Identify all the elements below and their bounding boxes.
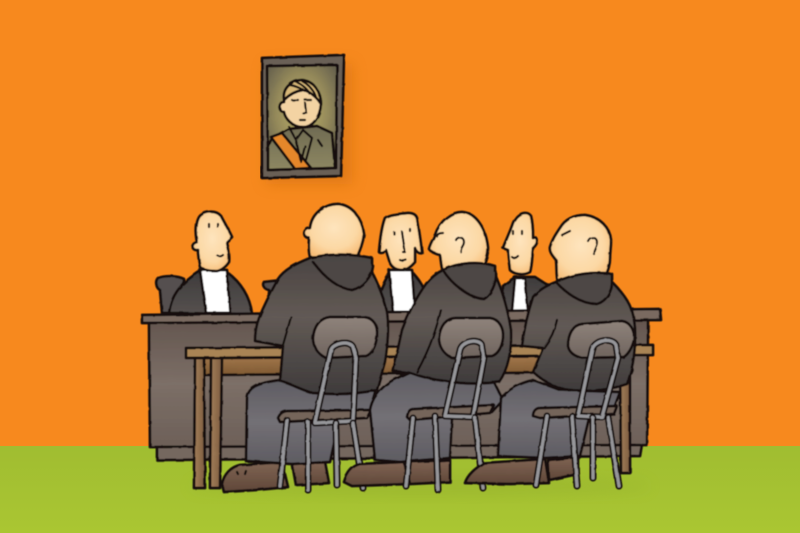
judge left: robe (169, 271, 252, 314)
judge right: white bib (512, 278, 528, 311)
judge right: robe (503, 277, 549, 313)
defendant 2: front shoe (344, 462, 408, 486)
long table (186, 345, 653, 488)
defendant 1: hood (313, 262, 373, 290)
defendant 1: back shoe (292, 462, 329, 485)
table legs (194, 358, 205, 488)
defendant 1: jacket (255, 255, 388, 394)
judge left: white bib (200, 270, 230, 313)
judge left (169, 212, 252, 314)
defendant 3: hood (556, 280, 612, 304)
defendant 2: back shoe (405, 460, 450, 484)
judge right: head (503, 213, 537, 274)
defendant 1: chair seat (278, 410, 371, 422)
portrait: hair (284, 80, 321, 104)
desk top (142, 309, 661, 323)
defendant 2 (middle) (344, 212, 511, 490)
portrait: facial features (292, 100, 311, 120)
portrait: sitter jacket (268, 126, 335, 170)
judge chair left (156, 276, 184, 313)
defendant 2: ear and brow (437, 233, 464, 252)
desk plinth (157, 444, 642, 460)
defendant 1: trousers (246, 380, 376, 464)
defendant 3: head (550, 215, 611, 283)
defendant 1: chair back (313, 317, 377, 358)
defendant 3: jacket (522, 273, 635, 391)
portrait shadow (266, 64, 352, 184)
judge centre: features (394, 229, 410, 261)
judge centre (376, 213, 430, 313)
defendant 3: trousers (498, 380, 620, 458)
desk front (149, 320, 648, 447)
defendant 1: head (304, 204, 364, 257)
defendant 2: chair seat (407, 405, 494, 420)
defendant 2: trousers (370, 372, 503, 462)
judges' desk (142, 309, 661, 460)
defendant 3 (right) (465, 215, 635, 486)
portrait: orange sash (271, 133, 311, 169)
defendant 3: back shoe (548, 457, 578, 480)
portrait: tie and collar (289, 127, 322, 162)
defendant 2: jacket (393, 263, 511, 383)
defendant 3: chair back (568, 321, 634, 358)
judge left: head (193, 212, 232, 271)
portrait on the wall (262, 55, 344, 178)
background: green floor (0, 446, 800, 533)
judge left: eyes and mouth (209, 224, 223, 256)
defendant 1: front shoe (222, 462, 288, 492)
table top (186, 345, 653, 358)
judge right (503, 213, 549, 313)
defendant 2: chair frame (406, 341, 484, 490)
judge centre: white bib (389, 270, 415, 313)
portrait: face (280, 82, 321, 127)
defendant 1 (left) (222, 204, 388, 492)
defendant 3: chair frame (536, 340, 619, 486)
defendant 2: head (429, 212, 488, 272)
defendant 3: ear and brow (562, 231, 597, 254)
judge chair middle (263, 280, 282, 300)
defendant 3: front shoe (465, 459, 549, 484)
defendant 3: chair seat (533, 406, 617, 418)
judge centre: robe (376, 272, 430, 313)
judge right: features (512, 231, 522, 258)
defendant 2: hood (443, 270, 496, 299)
defendant 2: chair back (439, 318, 503, 358)
table skirt (204, 356, 632, 375)
defendant 1: chair frame (280, 343, 363, 490)
judge centre: hair and head (379, 213, 422, 270)
